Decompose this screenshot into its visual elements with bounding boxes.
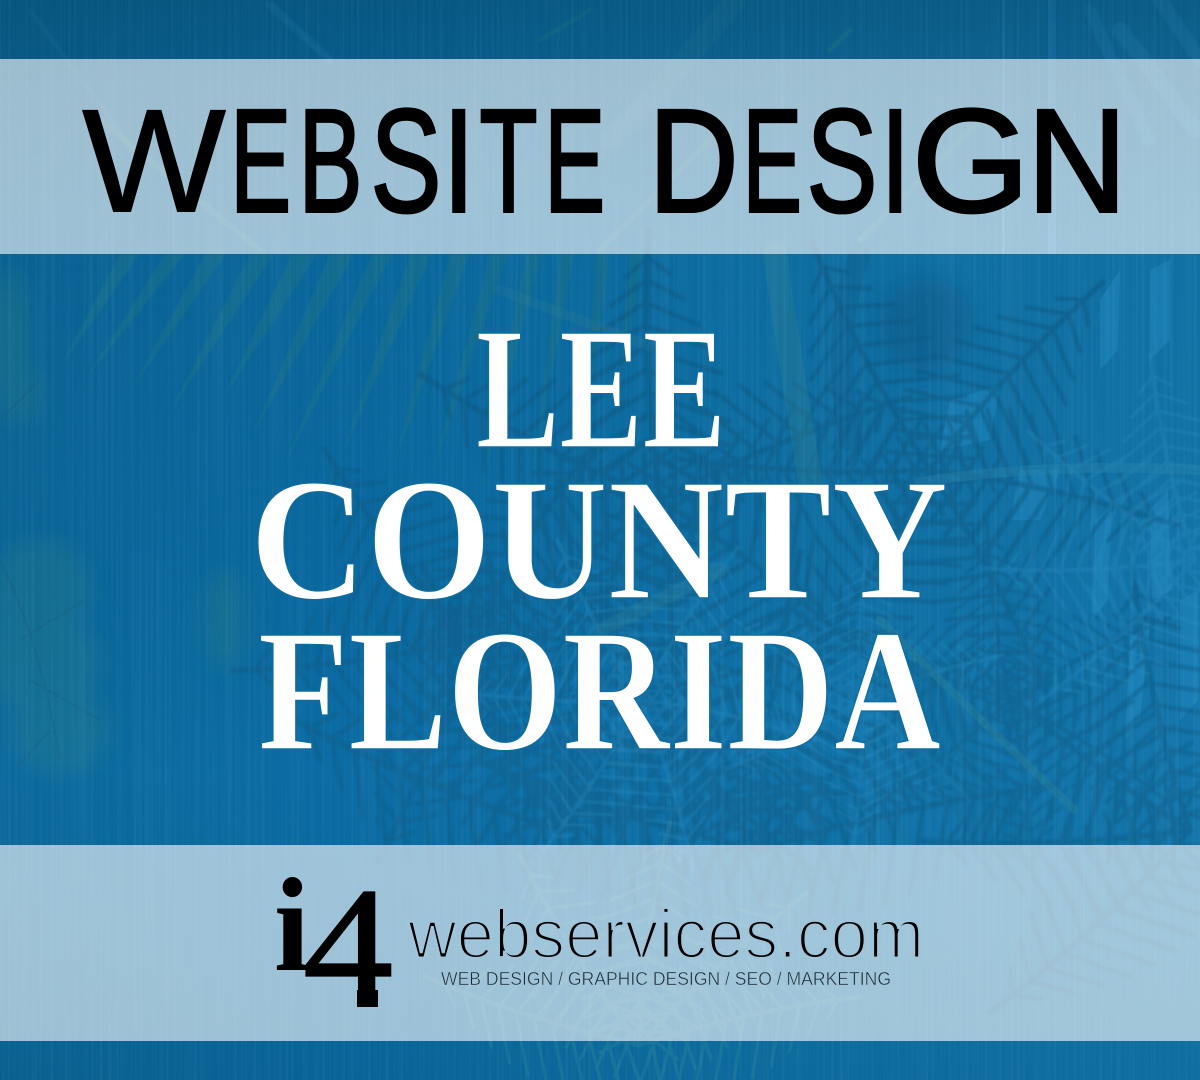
- heading: website design: S: [371, 80, 441, 244]
- heading: website design: W: [82, 80, 226, 244]
- palm stalks and dark masses: [500, 254, 1200, 830]
- heading: website design: I: [443, 80, 475, 244]
- light sky gaps between right fronds: [940, 260, 1198, 740]
- palm crowns centre and right: [222, 117, 1200, 1076]
- main title: Lee County Florida: [250, 292, 948, 787]
- heading: website design: G: [912, 80, 1030, 244]
- heading: website design: D: [649, 80, 738, 244]
- heading: website design: B: [298, 80, 362, 244]
- tree branches: [0, 380, 100, 770]
- leaves in top strip and bottom band: [30, 0, 1200, 250]
- heading: website design: T: [480, 80, 538, 244]
- bright vertical light streaks: [780, 0, 1056, 254]
- panel: bottom logo band: [0, 845, 1200, 1041]
- heading: website design: E: [544, 80, 605, 244]
- main title: Lee County Florida: FLORIDA: [258, 594, 941, 787]
- heading: website design: N: [1027, 80, 1127, 244]
- main title: Lee County Florida: COUNTY: [250, 443, 948, 636]
- foliage tree on left edge: [0, 270, 247, 775]
- heading: website design: E: [742, 80, 802, 244]
- logo: i4 webservices.com: [274, 851, 924, 1035]
- main title: Lee County Florida: LEE: [476, 292, 726, 485]
- heading: website design: E: [230, 80, 291, 244]
- panel: top heading band: [0, 59, 1200, 254]
- heading: website design: I: [881, 80, 910, 244]
- logo mark: i4: i: [274, 851, 310, 999]
- heading: website design: S: [807, 80, 877, 244]
- palm leaflets hanging top left: [57, 254, 642, 500]
- logo mark: i4: [274, 851, 393, 1035]
- logo wordmark: webservices.com: [407, 895, 924, 973]
- tagline: WEB DESIGN / GRAPHIC DESIGN / SEO / MARKETING: [441, 969, 891, 989]
- logo mark: i4: 4: [303, 856, 393, 1035]
